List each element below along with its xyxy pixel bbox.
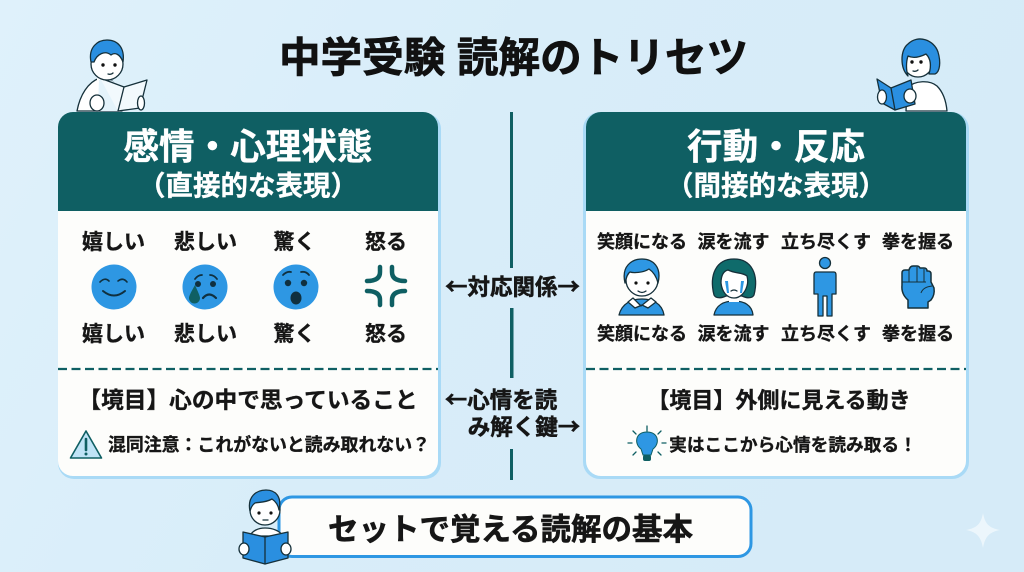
- upper action labels: 笑顔になる: [597, 232, 687, 252]
- tip text: 実はここから心情を読み取る！: [669, 435, 917, 455]
- upper emotion labels: 驚く: [274, 231, 316, 254]
- lower action labels: 立ち尽くす: [781, 324, 871, 344]
- title: 中学受験 読解のトリセツ: [279, 34, 748, 81]
- upper action labels: [597, 232, 954, 252]
- panel shadow border: [58, 113, 441, 479]
- panel body: [58, 112, 438, 476]
- panel header: [58, 112, 438, 211]
- subheading: direct: （直接的な表現）: [138, 170, 358, 201]
- lower action labels: 拳を握る: [882, 324, 954, 344]
- icon: warning triangle: [70, 431, 102, 458]
- panel body: [586, 112, 966, 476]
- subheading: indirect: （間接的な表現）: [666, 170, 886, 201]
- lower action labels: 涙を流す: [698, 324, 770, 344]
- illustration: boy reading top-left: [77, 40, 147, 111]
- upper emotion labels: 怒る: [365, 231, 407, 254]
- icon: smiling boy: [619, 259, 664, 315]
- icon: anger mark: [367, 267, 405, 305]
- warning text: 混同注意：これがないと読み取れない？: [108, 434, 430, 455]
- bottom banner: セットで覚える読解の基本: [328, 513, 694, 547]
- panel: left (direct expressions): [58, 112, 441, 479]
- bottom banner: [279, 497, 751, 556]
- illustration: girl reading top-right: [877, 39, 947, 111]
- panel header: [586, 112, 966, 211]
- panel: right (indirect expressions): [583, 112, 969, 479]
- center label: key to reading emotions: み解く鍵→: [468, 410, 580, 442]
- center label: key to reading emotions: ←心情を読: [445, 383, 558, 415]
- center label: correspondence: ←対応関係→: [445, 270, 580, 302]
- icon: happy face: [92, 264, 136, 310]
- center label: key to reading emotions: [445, 383, 580, 442]
- upper action labels: 立ち尽くす: [781, 232, 871, 252]
- center divider: [510, 112, 514, 480]
- icon: light bulb: [628, 426, 666, 461]
- upper emotion labels: [82, 231, 407, 254]
- lower emotion labels: 怒る: [365, 323, 407, 346]
- lower emotion labels: 嬉しい: [82, 323, 145, 346]
- icon: standing figure: [814, 258, 836, 316]
- icon: sad face: [182, 264, 228, 310]
- heading: actions: 行動・反応: [687, 127, 865, 167]
- lower action labels: 笑顔になる: [597, 324, 687, 344]
- boundary text: 【境目】外側に見える動き: [647, 388, 911, 413]
- lower emotion labels: 驚く: [274, 323, 316, 346]
- upper action labels: 涙を流す: [698, 232, 770, 252]
- lower action labels: [597, 324, 954, 344]
- icon: sparkle: [966, 513, 1000, 548]
- lower emotion labels: 悲しい: [174, 323, 237, 346]
- icon: surprised face: [274, 264, 318, 310]
- illustration: boy with blue book: [239, 490, 291, 564]
- upper emotion labels: 悲しい: [174, 231, 237, 254]
- upper emotion labels: 嬉しい: [82, 231, 145, 254]
- icon: crying woman: [712, 259, 756, 315]
- panel shadow border: [583, 112, 969, 479]
- lower emotion labels: [82, 323, 407, 346]
- upper action labels: 拳を握る: [882, 232, 954, 252]
- heading: emotions: 感情・心理状態: [123, 127, 373, 167]
- icon: fist: [902, 266, 934, 308]
- boundary text: 【境目】心の中で思っていること: [78, 387, 418, 413]
